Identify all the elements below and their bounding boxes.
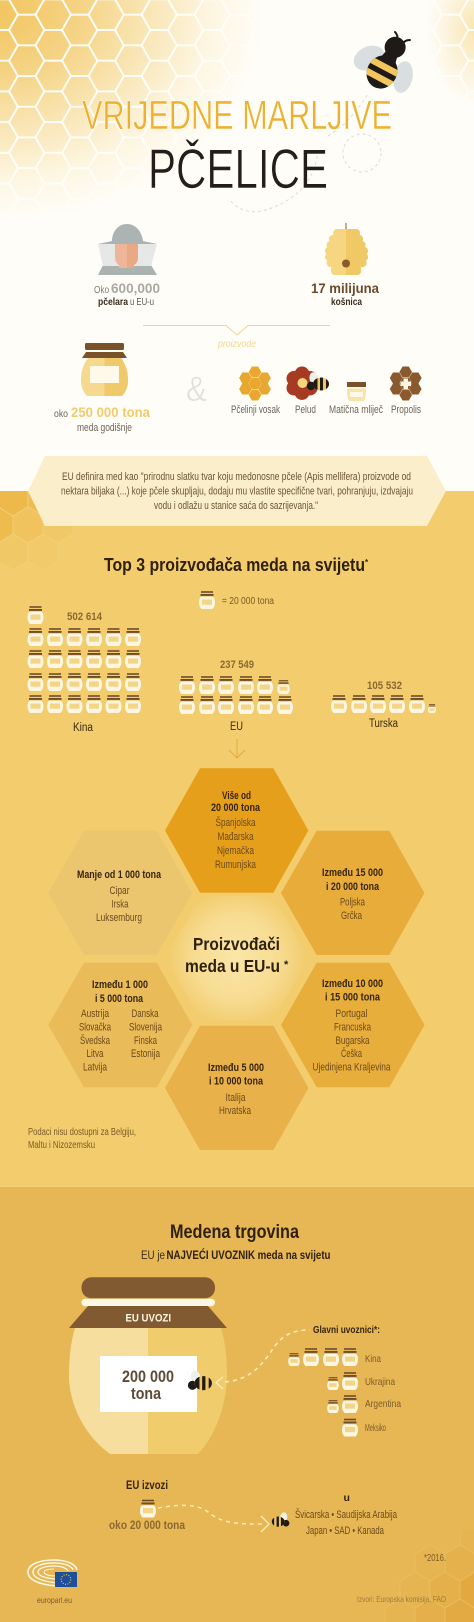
hexagon: 1 000 to 5 000 tonnes: Švedska: [80, 1034, 111, 1047]
ampersand: &: [186, 370, 207, 409]
hexagon: 10 000 to 15 000 tonnes: i 15 000 tona: [325, 992, 381, 1004]
chart: China jars: [28, 606, 141, 734]
icon: beehive: [325, 223, 368, 275]
chart: Turkey jars: [331, 680, 436, 730]
bee flight trail: [230, 95, 381, 212]
stat: beekeepers: [94, 281, 160, 308]
heading: honey trade: EU je: [141, 1250, 165, 1262]
hexagon: 10 000 to 15 000 tonnes: Češka: [341, 1047, 363, 1060]
list: main importers: Kina: [365, 1353, 381, 1365]
labels: bee products: [231, 404, 421, 416]
stat: honey per year: [54, 404, 150, 434]
logo: European Parliament: europarl.eu: [37, 1595, 72, 1605]
icon: large import jar: 200 000: [122, 1368, 174, 1386]
hexagon: 1 000 to 5 000 tonnes: Između 1 000: [92, 979, 148, 991]
icon: beekeeper: [98, 224, 157, 275]
hexagon: less than 1 000 tonnes: [48, 831, 192, 955]
chart: EU jars: 237 549: [220, 659, 254, 671]
labels: bee products: Pelud: [295, 404, 316, 416]
label: proizvode: proizvode: [217, 339, 256, 350]
hexagon: 1 000 to 5 000 tonnes: [48, 963, 192, 1087]
background: honeycomb bottom right: [384, 1530, 474, 1622]
icon: propolis: [390, 367, 422, 400]
heading: top 3 producers: Top 3 proizvođača meda na svijetu: [104, 555, 365, 575]
panel: honey definition: [28, 456, 446, 526]
hexagon: centre: meda u EU-u: [185, 956, 280, 976]
hexagon: 1 000 to 5 000 tonnes: Finska: [134, 1035, 158, 1047]
block: EU exports: EU izvozi: [126, 1478, 168, 1492]
labels: bee products: Matična mliječ: [329, 404, 383, 416]
hexagon: centre: Proizvođači: [193, 934, 280, 954]
hexagon: less than 1 000 tonnes: Cipar: [110, 885, 130, 897]
hexagon: 1 000 to 5 000 tonnes: Danska: [132, 1008, 159, 1020]
note: missing data: Podaci nisu dostupni za Belgiju,: [28, 1127, 136, 1138]
list: main importers: Meksiko: [365, 1422, 386, 1434]
hexagon: 10 000 to 15 000 tonnes: Portugal: [336, 1008, 368, 1020]
list: export destinations: [295, 1492, 398, 1537]
note: missing data: [28, 1127, 136, 1151]
hexagon: 1 000 to 5 000 tonnes: Estonija: [131, 1048, 161, 1060]
background: cream header: [0, 0, 474, 491]
hexagon: less than 1 000 tonnes: Manje od 1 000 tona: [77, 869, 162, 881]
list: export destinations: Japan • SAD • Kanada: [306, 1525, 385, 1537]
hexagon: 1 000 to 5 000 tonnes: Austrija: [81, 1008, 110, 1020]
labels: bee products: Propolis: [391, 404, 421, 416]
list: export destinations: Švicarska • Saudijska Arabija: [295, 1508, 398, 1521]
hexagon: 15 000 to 20 000 tonnes: Poljska: [340, 896, 366, 908]
hexagon: 10 000 to 15 000 tonnes: Bugarska: [336, 1035, 370, 1047]
list: main importers: [288, 1324, 401, 1436]
background: yellow section: [0, 491, 474, 1187]
arrow: down to EU producers: [229, 739, 245, 758]
hexagon: centre: [165, 896, 309, 1020]
block: EU exports: oko 20 000 tona: [109, 1520, 186, 1532]
hexagon: more than 20 000 tonnes: 20 000 tona: [211, 802, 261, 814]
hexagon: 10 000 to 15 000 tonnes: Ujedinjena Kraljevina: [312, 1062, 391, 1074]
arrow: import flow: [216, 1330, 310, 1389]
heading: honey trade: NAJVEĆI UVOZNIK meda na svijetu: [166, 1249, 330, 1262]
hexagon: centre: *: [284, 959, 289, 971]
arrow: export flow: [158, 1505, 269, 1532]
block: EU exports: [109, 1478, 186, 1532]
hexagon: more than 20 000 tonnes: Više od: [222, 790, 251, 802]
stat: beekeepers: Oko: [94, 285, 109, 296]
icon: flying bee: [354, 31, 413, 93]
background: honeycomb top left: [0, 0, 270, 225]
hexagon: 10 000 to 15 000 tonnes: Između 10 000: [322, 978, 383, 990]
hexagon: 10 000 to 15 000 tonnes: Francuska: [334, 1022, 372, 1034]
list: main importers: Argentina: [365, 1398, 401, 1410]
stat: beekeepers: 600,000: [111, 281, 160, 296]
heading: honey trade: Medena trgovina: [170, 1222, 299, 1243]
legend: jar scale: [199, 591, 274, 609]
heading: honey trade: [141, 1222, 330, 1262]
background: dark yellow section: [0, 1187, 474, 1622]
stat: beekeepers: u EU-u: [130, 296, 154, 308]
icon: large import jar: [69, 1277, 227, 1454]
legend: jar scale: = 20 000 tona: [222, 596, 274, 607]
icon: large import jar: EU UVOZI: [126, 1312, 171, 1324]
hexagon: 15 000 to 20 000 tonnes: i 20 000 tona: [326, 881, 380, 893]
chart: Turkey jars: Turska: [369, 718, 398, 730]
hexagon: less than 1 000 tonnes: Irska: [112, 898, 129, 910]
hexagon: 5 000 to 10 000 tonnes: Hrvatska: [219, 1105, 252, 1117]
hexagon: 1 000 to 5 000 tonnes: Latvija: [83, 1062, 108, 1074]
chart: EU jars: EU: [230, 721, 243, 733]
icon: honey jar: [81, 343, 128, 396]
hexagon: 1 000 to 5 000 tonnes: Slovenija: [129, 1022, 163, 1034]
hexagon: 1 000 to 5 000 tonnes: Litva: [86, 1048, 104, 1060]
hexagon: less than 1 000 tonnes: Luksemburg: [96, 912, 142, 924]
chart: Turkey jars: 105 532: [367, 680, 402, 692]
stat: hives: 17 milijuna: [311, 281, 379, 296]
chart: China jars: 502 614: [67, 611, 103, 623]
stat: honey per year: 250 000 tona: [71, 404, 150, 420]
icon: pollen flower with bee: [286, 366, 330, 400]
list: main importers: Glavni uvoznici*:: [313, 1324, 380, 1336]
hexagon: 5 000 to 10 000 tonnes: Italija: [226, 1092, 246, 1104]
chart: China jars: Kina: [73, 722, 94, 734]
stat: hives: košnica: [331, 296, 362, 308]
footer: source: Izvori: Europska komisija, FAO: [357, 1594, 446, 1604]
icon: royal jelly jar: [347, 382, 366, 401]
stat: honey per year: oko: [54, 408, 68, 420]
hexagon: 15 000 to 20 000 tonnes: [281, 831, 424, 955]
labels: bee products: Pčelinji vosak: [231, 404, 280, 416]
hexagon: more than 20 000 tonnes: Njemačka: [217, 845, 255, 857]
hexagon: more than 20 000 tonnes: Mađarska: [218, 831, 254, 843]
hexagon: 15 000 to 20 000 tonnes: Grčka: [341, 910, 363, 922]
hexagon: more than 20 000 tonnes: Rumunjska: [215, 859, 257, 871]
hexagon: 10 000 to 15 000 tonnes: [281, 963, 424, 1087]
bracket: produce: [143, 326, 330, 335]
panel: honey definition: vodu i odlažu u stanice saća do sazrijevanja.": [154, 500, 318, 512]
stat: hives: [311, 281, 379, 308]
hexagon: 5 000 to 10 000 tonnes: Između 5 000: [208, 1062, 264, 1074]
heading: top 3 producers: *: [365, 558, 369, 567]
title: [82, 92, 392, 200]
stat: beekeepers: pčelara: [98, 296, 128, 308]
hexagon: 1 000 to 5 000 tonnes: Slovačka: [79, 1022, 112, 1034]
hexagon: 15 000 to 20 000 tonnes: Između 15 000: [322, 867, 383, 879]
note: missing data: Maltu i Nizozemsku: [28, 1140, 95, 1151]
list: export destinations: u: [344, 1492, 350, 1504]
hexagon: more than 20 000 tonnes: [165, 768, 308, 893]
icon: export bee: [271, 1512, 289, 1528]
hexagon: more than 20 000 tonnes: Španjolska: [216, 816, 256, 829]
hexagon: 1 000 to 5 000 tonnes: i 5 000 tona: [95, 993, 144, 1005]
hexagon: 5 000 to 10 000 tonnes: [165, 1026, 308, 1150]
title: PČELICE: [148, 137, 328, 200]
footnote: year: *2016.: [424, 1553, 446, 1564]
background: honeycomb top right: [425, 0, 474, 112]
background: honeycomb yellow section: [0, 491, 74, 570]
hexagon: 5 000 to 10 000 tonnes: i 10 000 tona: [209, 1076, 264, 1088]
chart: EU jars: [179, 659, 293, 733]
stat: honey per year: meda godišnje: [77, 422, 132, 434]
logo: European Parliament: [28, 1560, 77, 1605]
icon: bee on import label: [188, 1370, 213, 1392]
icon: large import jar: tona: [131, 1385, 162, 1403]
icon: beeswax: [239, 367, 271, 400]
list: main importers: Ukrajina: [365, 1376, 395, 1388]
